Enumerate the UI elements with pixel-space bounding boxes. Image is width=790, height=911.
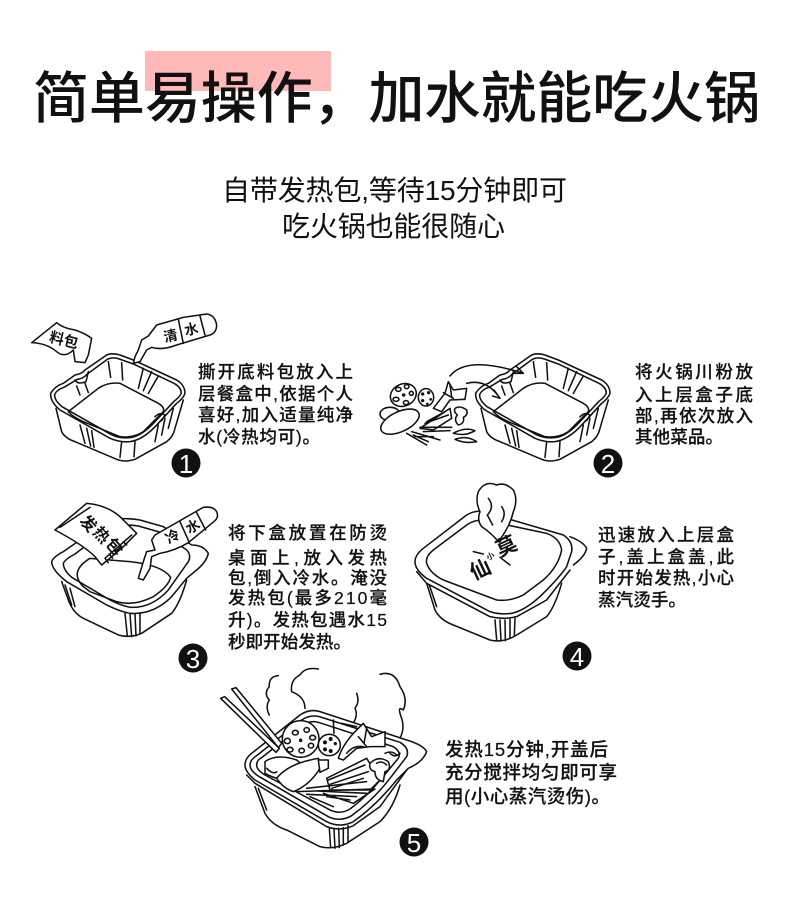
instruction text: 蒸汽烫手。 (598, 590, 686, 610)
instruction text: 桌面上,放入发热 (228, 548, 388, 568)
instruction text (445, 739, 617, 807)
number badge 1: 1 (179, 449, 193, 479)
instruction text: 层餐盒中,依据个人 (198, 384, 353, 404)
panel: step 2 (377, 354, 754, 479)
instruction text: 用(小心蒸汽烫伤)。 (445, 786, 610, 807)
instruction text: 发热15分钟,开盖后 (445, 739, 608, 760)
instruction text: 时开始发热,小心 (598, 568, 734, 588)
number badge 2: 2 (601, 449, 615, 479)
illustration: tray with seasoning packet and water bottle (32, 314, 217, 461)
instruction text: 撕开底料包放入上 (198, 362, 353, 382)
instruction text: 秒即开始发热。 (228, 632, 351, 652)
instruction text (598, 525, 734, 610)
instruction text: 喜好,加入适量纯净 (198, 405, 353, 425)
instruction text: 将下盒放置在防烫 (228, 523, 387, 543)
number badge 4: 4 (570, 642, 584, 672)
number badge 2 (594, 448, 622, 479)
instruction text: 充分搅拌均匀即可享 (445, 762, 617, 783)
instruction text: 水(冷热均可)。 (198, 427, 320, 447)
subtitle: 吃火锅也能很随心 (282, 211, 505, 242)
illustration: lower tray with heating pack and water bottle: 包 (102, 534, 126, 559)
illustration: lower tray with heating pack and water bottle: 冷 (162, 526, 183, 547)
illustration: lower tray with heating pack and water bottle: 发 (76, 511, 101, 536)
instruction text (228, 523, 388, 652)
illustration: lidded box with steam (415, 483, 587, 641)
title highlight (145, 51, 331, 91)
number badge 4 (562, 642, 592, 672)
instruction text: 其他菜品。 (635, 427, 723, 447)
subtitle (222, 175, 567, 242)
illustration: tray with seasoning packet and water bottle: 料包 (47, 328, 81, 353)
panel: step 5 (221, 668, 617, 858)
number badge 5: 5 (407, 828, 421, 858)
illustration: tray with seasoning packet and water bottle: 水 (183, 320, 200, 338)
illustration: finished hot pot with chopsticks and steam (221, 668, 427, 848)
illustration: lower tray with heating pack and water bottle (52, 503, 218, 637)
number badge 3: 3 (186, 644, 200, 674)
panel: step 4 (415, 483, 734, 672)
instruction text: 子,盖上盒盖,此 (598, 547, 734, 567)
instruction text: 升)。发热包遇水15 (228, 610, 387, 630)
panel: step 1 (32, 314, 353, 479)
instruction text: 迅速放入上层盒 (598, 525, 734, 545)
illustration: tray with seasoning packet and water bottle: 清 (162, 326, 179, 345)
instruction text (198, 362, 353, 447)
illustration: food and arrows (377, 365, 523, 445)
illustration: lower tray with heating pack and water bottle: 热 (89, 523, 113, 547)
instruction text: 将火锅川粉放 (635, 362, 754, 382)
illustration: lower tray with heating pack and water bottle: 水 (183, 516, 203, 537)
instruction text: 发热包(最多210毫 (228, 588, 387, 608)
instruction text: 入上层盒子底 (635, 385, 753, 405)
instruction text (635, 362, 754, 447)
instruction text: 包,倒入冷水。淹没 (228, 568, 387, 588)
illustration: lidded box with steam: 仙 (466, 555, 495, 585)
illustration: lidded box with steam: 小 (485, 550, 496, 562)
instruction text: 部,再依次放入 (635, 406, 753, 426)
panel: step 3 (52, 503, 388, 674)
illustration: lidded box with steam: 莫 (492, 532, 521, 562)
number badge 5 (400, 828, 428, 858)
illustration: tray (476, 354, 610, 461)
number badge 1 (172, 448, 200, 479)
number badge 3 (178, 644, 208, 674)
subtitle: 自带发热包,等待15分钟即可 (222, 175, 567, 206)
title: 简单易操作，加水就能吃火锅 (33, 67, 760, 130)
